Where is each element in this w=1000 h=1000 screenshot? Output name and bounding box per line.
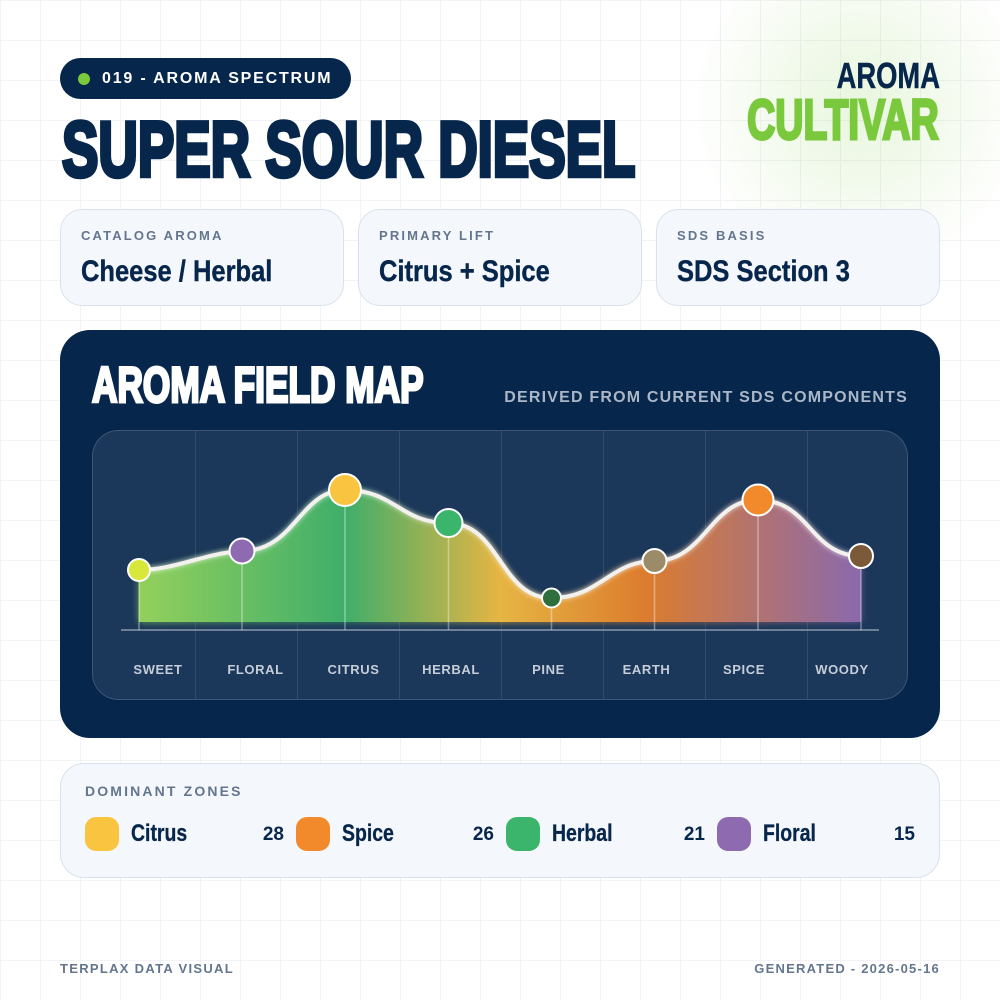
value: citrus: 28 (263, 824, 284, 845)
marker: herbal (434, 509, 462, 537)
axis labels: HERBAL (422, 662, 480, 677)
name: spice: Spice (342, 820, 394, 847)
wordmark: cultivar: CULTIVAR (747, 88, 939, 152)
stems (139, 490, 861, 630)
footer: source: TERPLAX DATA VISUAL (60, 961, 234, 976)
marker: pine (542, 588, 561, 608)
card label: SDS BASIS (677, 228, 766, 243)
card label: CATALOG AROMA (81, 228, 224, 243)
column dividers (196, 431, 808, 699)
value: spice: 26 (473, 824, 494, 845)
axis line (121, 629, 879, 631)
panel heading: AROMA FIELD MAP (92, 357, 424, 413)
panel: aroma field map (60, 330, 940, 738)
chart frame (92, 430, 908, 700)
panel subheading: DERIVED FROM CURRENT SDS COMPONENTS (504, 389, 908, 406)
name: herbal: Herbal (552, 820, 613, 847)
swatch: herbal (506, 817, 540, 851)
badge text: 019 - AROMA SPECTRUM (102, 70, 332, 87)
axis labels: EARTH (623, 662, 670, 677)
axis labels: SWEET (133, 662, 183, 677)
card: sds basis (656, 209, 940, 306)
card value: SDS Section 3 (677, 255, 850, 288)
marker: citrus (329, 474, 361, 506)
wordmark: aroma: AROMA (837, 55, 940, 96)
axis labels: WOODY (815, 662, 869, 677)
card: primary lift (358, 209, 642, 306)
title: SUPER SOUR DIESEL (62, 105, 635, 193)
swatch: floral (717, 817, 751, 851)
marker: earth (642, 549, 666, 573)
swatch: citrus (85, 817, 119, 851)
name: floral: Floral (763, 820, 816, 847)
marker: floral (230, 538, 254, 564)
name: citrus: Citrus (131, 820, 187, 847)
badge: aroma spectrum (60, 58, 351, 99)
marker: sweet (128, 559, 150, 581)
marker: woody (849, 544, 873, 568)
axis labels: CITRUS (328, 662, 380, 677)
axis labels: SPICE (723, 662, 765, 677)
area fill (139, 490, 861, 622)
curve line (139, 490, 861, 598)
card label: PRIMARY LIFT (379, 228, 495, 243)
curve glow (139, 490, 861, 598)
card value: Citrus + Spice (379, 255, 550, 288)
badge dot (78, 73, 90, 85)
value: floral: 15 (894, 824, 915, 845)
panel: dominant zones (60, 763, 940, 878)
axis labels: PINE (532, 662, 565, 677)
card value: Cheese / Herbal (81, 255, 272, 288)
card: catalog aroma (60, 209, 344, 306)
value: herbal: 21 (684, 824, 705, 845)
area glow (139, 490, 861, 622)
marker: spice (742, 484, 774, 516)
footer: generated date: GENERATED - 2026-05-16 (754, 961, 940, 976)
axis labels: FLORAL (227, 662, 284, 677)
swatch: spice (296, 817, 330, 851)
axis labels (133, 662, 869, 677)
zones heading: DOMINANT ZONES (85, 783, 243, 799)
